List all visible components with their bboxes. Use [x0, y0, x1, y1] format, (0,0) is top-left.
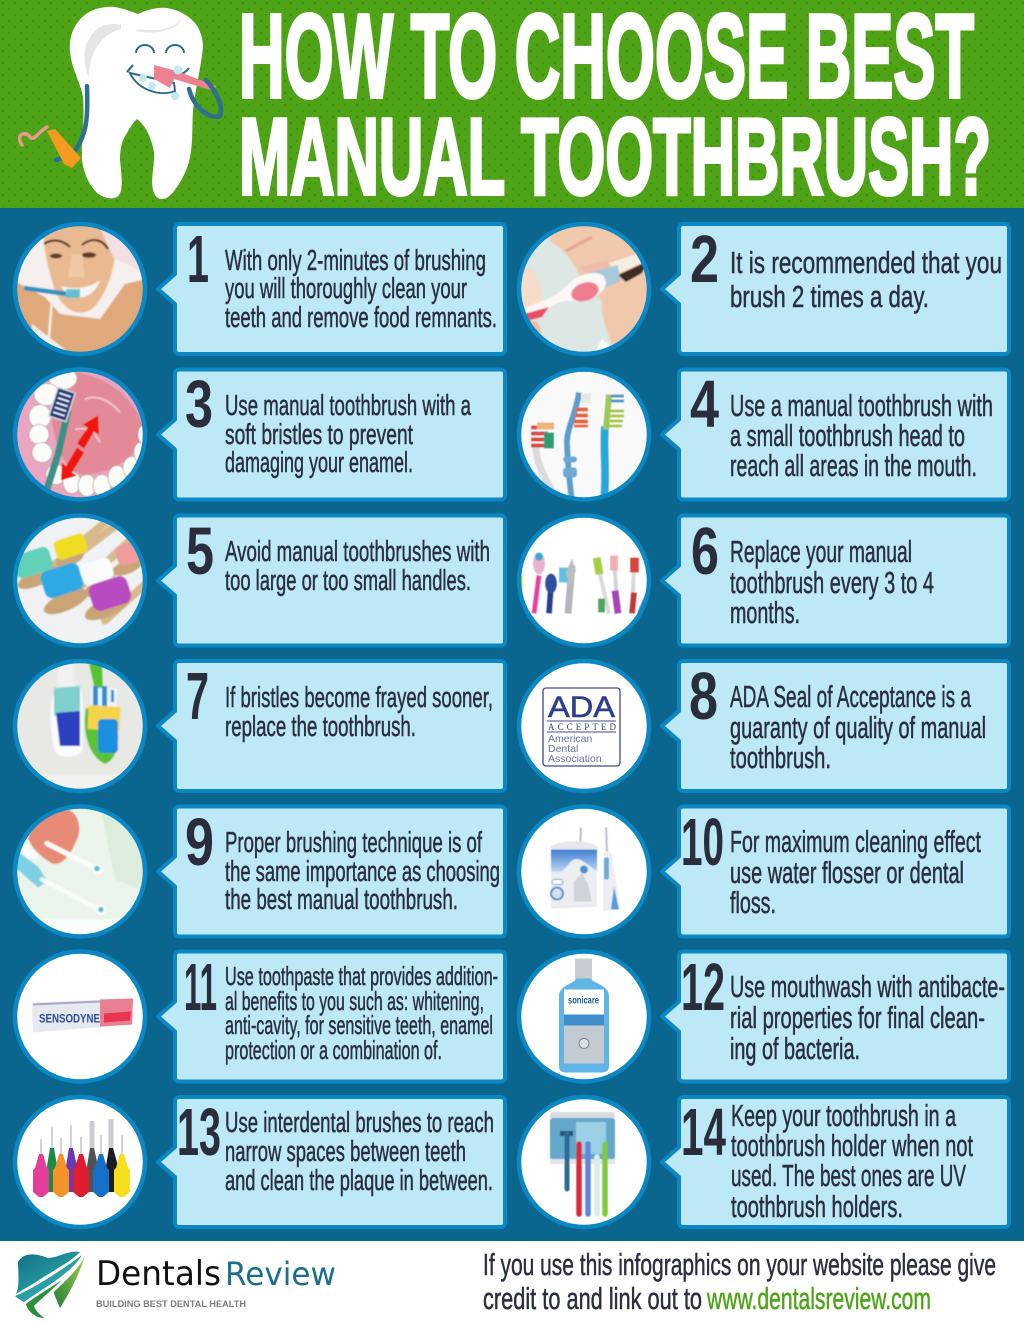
number: 10 — [681, 805, 724, 880]
icon: frayed and new bristles — [14, 660, 146, 792]
text — [225, 536, 490, 597]
text — [731, 1098, 973, 1224]
icon: row of toothbrushes — [518, 514, 650, 646]
panel: tip 3 — [14, 367, 505, 500]
icon: ADA seal of acceptance: American — [548, 733, 593, 745]
text: replace the toothbrush. — [225, 711, 416, 743]
panel: tip 1 — [14, 222, 505, 355]
header band — [0, 0, 1024, 208]
text: al benefits to you such as: whitening, — [225, 986, 484, 1016]
callout bubble — [158, 952, 505, 1082]
number: 7 — [186, 659, 209, 734]
panel: tip 11 — [15, 950, 505, 1082]
number: 5 — [186, 514, 214, 589]
text — [225, 1107, 494, 1197]
text — [225, 961, 498, 1065]
panel: tip 12 — [519, 950, 1009, 1082]
icon: ADA seal of acceptance: ACCEPTED — [548, 722, 616, 732]
text: If bristles become frayed sooner, — [225, 682, 493, 714]
text: too large or too small handles. — [225, 565, 471, 597]
number: 2 — [690, 222, 719, 297]
icon: woman brushing teeth — [14, 223, 146, 355]
panel: tip 10 — [519, 805, 1009, 936]
text: teeth and remove food remnants. — [225, 302, 497, 334]
ring — [15, 1097, 145, 1227]
footer band — [0, 1241, 1024, 1325]
callout bubble — [662, 516, 1009, 646]
number: 14 — [681, 1095, 726, 1170]
tagline: BUILDING BEST DENTAL HEALTH — [96, 1299, 246, 1309]
text: With only 2-minutes of brushing — [225, 245, 486, 277]
panel: tip 14 — [519, 1095, 1009, 1227]
text: anti-cavity, for sensitive teeth, enamel — [225, 1010, 493, 1040]
text: protection or a combination of. — [225, 1035, 442, 1065]
number: 8 — [689, 659, 718, 734]
callout bubble — [662, 952, 1009, 1082]
text — [730, 534, 934, 630]
ring — [519, 1097, 649, 1227]
text: and clean the plaque in between. — [225, 1165, 493, 1197]
wordmark accent: Review — [225, 1255, 336, 1293]
number: 12 — [681, 950, 725, 1025]
text: damaging your enamel. — [225, 447, 413, 479]
text: Avoid manual toothbrushes with — [225, 536, 490, 568]
text — [225, 682, 493, 743]
text — [225, 245, 497, 334]
icon: three toothbrushes — [518, 368, 650, 500]
text: toothbrush. — [730, 740, 831, 775]
number: 13 — [177, 1095, 221, 1170]
text: ing of bacteria. — [730, 1031, 860, 1066]
panel: tip 11: 11 — [184, 950, 217, 1025]
ring — [519, 806, 649, 936]
text — [730, 969, 1005, 1066]
icon: mouthwash bottle: sonicare — [568, 996, 599, 1006]
icon: Sensodyne toothpaste box — [15, 952, 145, 1082]
callout bubble — [158, 370, 505, 500]
text: the best manual toothbrush. — [225, 884, 458, 916]
panel: tip 2 — [518, 222, 1009, 355]
panel: tip 5 — [11, 514, 505, 646]
number: 3 — [185, 367, 213, 442]
icon: hand holding toothbrush — [14, 806, 146, 938]
number: 6 — [691, 514, 719, 589]
text: soft bristles to prevent — [225, 419, 413, 451]
icon: ADA seal of acceptance: Dental — [548, 743, 578, 755]
text: Use interdental brushes to reach — [225, 1107, 494, 1139]
text — [730, 388, 993, 483]
text — [730, 824, 981, 920]
ring — [519, 661, 649, 791]
text: the same importance as choosing — [225, 856, 500, 888]
callout bubble — [662, 806, 1009, 936]
title — [239, 0, 991, 218]
text — [225, 390, 472, 479]
icon: colourful bamboo toothbrushes — [11, 514, 155, 646]
icon: logo tooth swirl — [15, 1252, 85, 1318]
text: months. — [730, 595, 800, 630]
callout bubble — [158, 516, 505, 646]
ring — [519, 952, 649, 1082]
callout bubble — [662, 661, 1009, 791]
credit text — [483, 1247, 996, 1316]
wordmark: Dentals — [96, 1254, 221, 1294]
icon: water flosser — [519, 806, 649, 936]
text: toothbrush holders. — [731, 1189, 903, 1224]
icon: mouthwash bottle — [519, 952, 649, 1082]
text: floss. — [730, 885, 776, 920]
text: narrow spaces between teeth — [225, 1136, 466, 1168]
callout bubble — [662, 224, 1009, 354]
text — [730, 245, 1002, 314]
callout bubble — [158, 806, 505, 936]
panel: tip 13 — [15, 1095, 505, 1227]
panel: tip 6 — [518, 514, 1009, 646]
icon: smiling tooth mascot brushing — [20, 7, 221, 199]
icon: brushing soft bristles diagram — [14, 368, 148, 500]
text: Proper brushing technique is of — [225, 827, 483, 859]
panel: tip 9 — [14, 805, 505, 938]
number: 4 — [690, 367, 719, 442]
number: 9 — [185, 805, 214, 880]
logo: DentalsReview — [15, 1252, 336, 1318]
callout bubble — [662, 370, 1009, 500]
icon: ADA seal of acceptance: Association — [548, 753, 602, 765]
icon: Sensodyne toothpaste box: SENSODYNE — [39, 1012, 100, 1026]
number: 1 — [187, 222, 209, 297]
callout bubble — [158, 1097, 505, 1227]
text: you will thoroughly clean your — [225, 273, 467, 305]
callout bubble — [158, 661, 505, 791]
text — [730, 679, 986, 775]
icon: ADA seal of acceptance: ADA — [548, 691, 615, 724]
text: Replace your manual — [730, 534, 912, 569]
credit text: credit to and link out to — [483, 1281, 702, 1316]
panel: tip 7 — [14, 659, 505, 792]
text: Use manual toothbrush with a — [225, 390, 472, 422]
panel: tip 8 — [519, 659, 1009, 791]
icon: brushing close-up — [518, 223, 650, 355]
text: Use toothpaste that provides addition- — [225, 961, 498, 991]
panel: tip 4 — [518, 367, 1009, 500]
callout bubble — [158, 224, 505, 354]
callout bubble — [662, 1097, 1009, 1227]
icon: ADA seal of acceptance — [519, 661, 649, 791]
text — [225, 827, 500, 916]
text: brush 2 times a day. — [730, 279, 929, 314]
icon: UV toothbrush holder — [519, 1097, 649, 1227]
ring — [15, 952, 145, 1082]
icon: interdental brushes — [15, 1097, 145, 1227]
